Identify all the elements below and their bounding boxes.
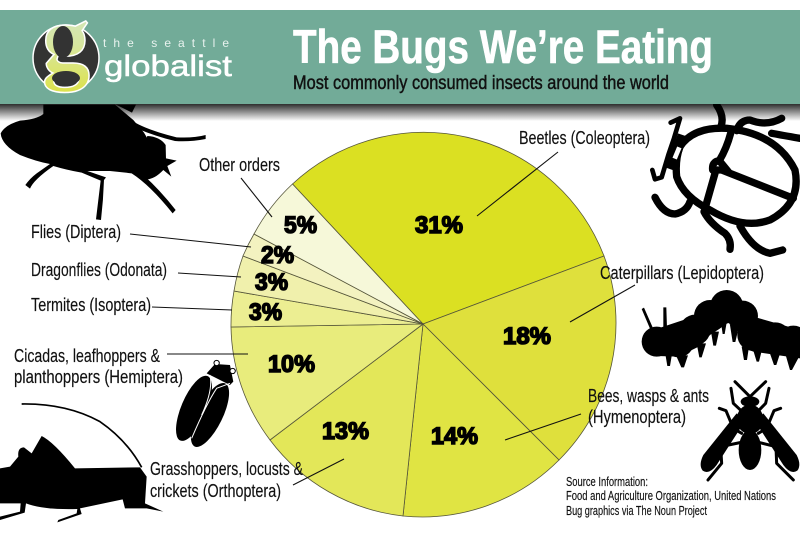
- percent labels: 3%: [249, 299, 282, 326]
- category labels: Dragonflies (Odonata): [31, 259, 167, 280]
- leader lines: [130, 152, 635, 485]
- icon: beetle outline: [652, 105, 800, 253]
- category labels: [14, 127, 764, 501]
- icon: grasshopper: [0, 404, 163, 522]
- category labels: Beetles (Coleoptera): [519, 127, 650, 148]
- percent labels: 18%: [503, 323, 551, 350]
- category labels: Grasshoppers, locusts &: [150, 458, 304, 479]
- percent labels: 31%: [415, 212, 463, 239]
- source information: Source Information:: [566, 474, 648, 489]
- category labels: Flies (Diptera): [31, 221, 121, 242]
- title: The Bugs We’re Eating: [293, 20, 713, 73]
- category labels: planthoppers (Hemiptera): [14, 366, 183, 387]
- icon: fly silhouette: [1, 105, 206, 220]
- slice: caterpillars 18%: [423, 256, 616, 460]
- percent labels: 2%: [261, 242, 294, 269]
- header banner: [0, 10, 800, 104]
- percent labels: 14%: [431, 423, 478, 450]
- logo wordmark: the seattle: [103, 36, 229, 50]
- category labels: crickets (Orthoptera): [150, 480, 281, 501]
- slice: grasshoppers 13%: [270, 324, 423, 516]
- slice: dragonflies 3%: [234, 256, 423, 324]
- pie chart: [231, 132, 616, 517]
- category labels: (Hymenoptera): [588, 406, 686, 427]
- category labels: Bees, wasps & ants: [588, 385, 709, 406]
- logo g lower counter: [52, 71, 80, 85]
- slice: cicadas 10%: [231, 324, 423, 440]
- logo circle: [33, 25, 99, 91]
- source information: Bug graphics via The Noun Project: [566, 503, 707, 518]
- icon: caterpillar: [642, 290, 800, 370]
- logo: globalist: [104, 50, 233, 83]
- icon: wasp: [701, 382, 799, 480]
- logo: [33, 0, 233, 93]
- icon: cicada: [169, 360, 237, 452]
- logo g upper counter: [53, 26, 73, 58]
- slice: flies 2%: [243, 234, 423, 324]
- subtitle: Most commonly consumed insects around the world: [293, 73, 669, 94]
- percent labels: 5%: [284, 212, 317, 239]
- slice: other 5%: [254, 184, 423, 324]
- slice: beetles 31%: [292, 132, 604, 324]
- category labels: Cicadas, leafhoppers &: [14, 345, 161, 366]
- category labels: Other orders: [199, 154, 280, 175]
- slice: bees 14%: [403, 324, 559, 517]
- percent labels: 3%: [255, 269, 288, 296]
- category labels: Termites (Isoptera): [31, 294, 151, 315]
- slice: termites 3%: [231, 291, 423, 327]
- percent labels: 10%: [268, 351, 315, 378]
- source information: [566, 474, 776, 518]
- header shadow: [0, 104, 800, 121]
- percent labels: 13%: [322, 418, 369, 445]
- percent labels: [249, 212, 551, 450]
